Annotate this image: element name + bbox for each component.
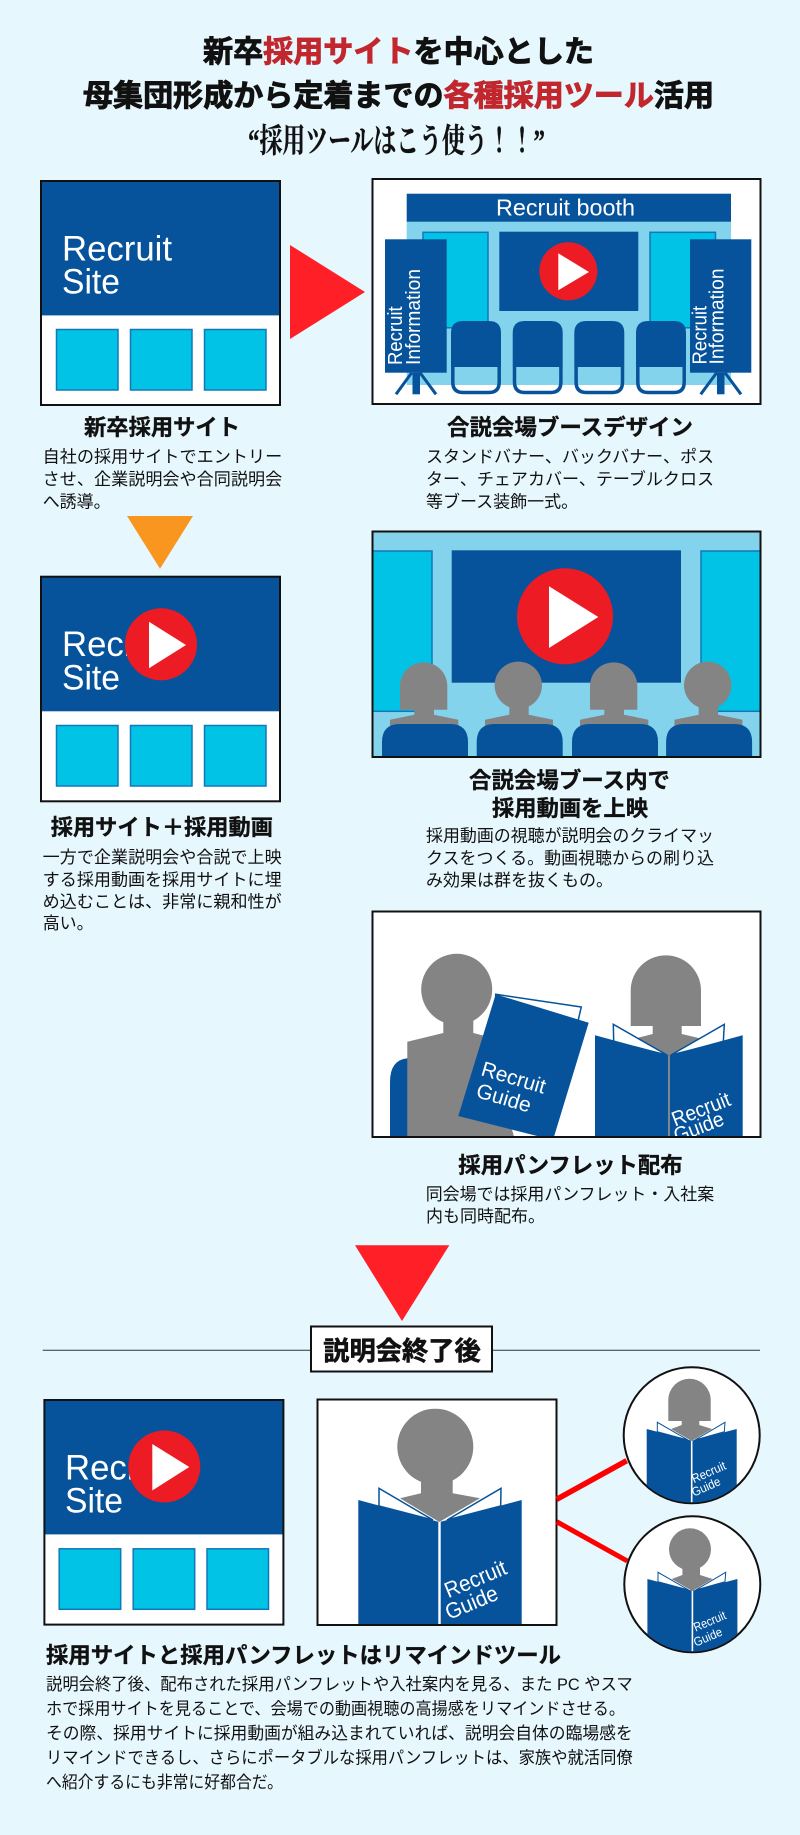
- panel: site with video: Site: [62, 658, 120, 697]
- text: recruit site: [43, 448, 282, 512]
- text: remind tools: リマインドできるし、さらにポータブルな採用パンフレットは、家族や就活同僚: [46, 1748, 633, 1768]
- left stand banner: Recruit: [385, 306, 407, 365]
- text: remind tools: ホで採用サイトを見ることで、会場での動画視聴の高揚感をリマインドさせる。: [46, 1700, 625, 1718]
- icon: play button: [539, 242, 597, 300]
- circle: family man: Guide: [691, 1625, 725, 1649]
- text: booth design: スタンドバナー、バックバナー、ポス: [426, 448, 714, 466]
- panel: pamphlet distribution: [372, 912, 760, 1148]
- divider with label: after briefing: 説明会終了後: [323, 1336, 481, 1366]
- panel: booth design: [372, 179, 760, 404]
- title: 母集団形成から定着までの各種採用ツール活用: [83, 80, 714, 113]
- man reading: [390, 954, 589, 1140]
- text: recruit site: させ、企業説明会や合同説明会: [43, 470, 282, 489]
- text: pamphlet distribution: 内も同時配布。: [426, 1207, 545, 1226]
- text: remind tools: その際、採用サイトに採用動画が組み込まれていれば、説明会自体の臨場感を: [46, 1724, 633, 1743]
- text: pamphlet distribution: 同会場では採用パンフレット・入社案: [426, 1185, 714, 1204]
- heading: video screening: 採用動画を上映: [492, 796, 648, 821]
- text: site with video: 高い。: [43, 914, 94, 933]
- circle: family woman: Recruit: [690, 1458, 729, 1486]
- text: site with video: 一方で企業説明会や合説で上映: [43, 848, 282, 867]
- circle: family man: [624, 1516, 760, 1660]
- panel: site with video: Recruit: [62, 625, 172, 664]
- connector lines: [557, 1461, 627, 1561]
- icon: play button: [517, 568, 613, 664]
- circle: family woman: Guide: [690, 1474, 723, 1499]
- panel: site with video: [41, 577, 280, 801]
- panel: person reading pamphlet: Recruit: [441, 1555, 510, 1603]
- text: video screening: [426, 826, 714, 890]
- man reading: Recruit: [479, 1058, 549, 1099]
- text: video screening: クスをつくる。動画視聴からの刷り込: [426, 849, 714, 868]
- woman reading: Guide: [671, 1108, 727, 1148]
- divider with label: after briefing: [43, 1326, 760, 1372]
- audience: [382, 662, 752, 757]
- subtitle: “採用ツールはこう使う！！”: [248, 123, 545, 160]
- text: remind tools: 説明会終了後、配布された採用パンフレットや入社案内を見る、また PC やスマ: [46, 1675, 633, 1694]
- woman reading: Recruit: [669, 1088, 734, 1131]
- left stand banner: Information: [403, 269, 425, 365]
- heading: video screening: 合説会場ブース内で: [469, 767, 670, 793]
- title: 新卒採用サイトを中心とした: [203, 36, 594, 69]
- heading: remind tools: 採用サイトと採用パンフレットはリマインドツール: [46, 1643, 561, 1668]
- left stand banner: [385, 239, 447, 394]
- icon: play button: [128, 1430, 200, 1502]
- heading: site with video: 採用サイト＋採用動画: [51, 815, 273, 840]
- text: site with video: する採用動画を採用サイトに埋: [43, 870, 282, 890]
- panel: recruit site: Recruit: [62, 229, 172, 268]
- panel: person reading pamphlet: Guide: [441, 1580, 502, 1625]
- panel: remind site: Recruit: [65, 1448, 175, 1487]
- text: video screening: み効果は群を抜くもの。: [426, 871, 613, 890]
- arrow: red down: [355, 1245, 449, 1321]
- panel: remind site: [44, 1400, 283, 1625]
- title: [83, 36, 714, 160]
- text: pamphlet distribution: [426, 1185, 714, 1226]
- chairs: [451, 321, 686, 392]
- text: site with video: [43, 848, 282, 933]
- text: remind tools: [46, 1675, 633, 1792]
- man reading: Guide: [474, 1079, 534, 1117]
- heading: booth design: 合説会場ブースデザイン: [447, 414, 693, 440]
- text: booth design: ター、チェアカバー、テーブルクロス: [426, 469, 714, 489]
- panel: remind site: Site: [65, 1482, 123, 1521]
- text: video screening: 採用動画の視聴が説明会のクライマッ: [426, 826, 714, 846]
- circle: family man: Recruit: [691, 1608, 729, 1634]
- woman reading: [595, 955, 743, 1148]
- text: recruit site: へ誘導。: [43, 492, 111, 512]
- panel: person reading pamphlet: [318, 1400, 556, 1630]
- heading: video screening: [469, 767, 670, 821]
- icon: play button: [125, 608, 197, 680]
- panel: booth design: Recruit booth: [496, 194, 635, 220]
- text: booth design: 等ブース装飾一式。: [426, 492, 578, 512]
- arrow: orange down: [127, 516, 193, 569]
- circle: family woman: [624, 1367, 760, 1510]
- right stand banner: Recruit: [690, 305, 712, 364]
- text: site with video: め込むことは、非常に親和性が: [43, 892, 282, 912]
- panel: recruit site: [41, 181, 280, 405]
- text: booth design: [426, 448, 714, 512]
- right stand banner: Information: [706, 268, 728, 364]
- text: remind tools: へ紹介するにも非常に好都合だ。: [46, 1773, 283, 1792]
- right stand banner: [690, 239, 751, 394]
- heading: pamphlet distribution: 採用パンフレット配布: [458, 1153, 683, 1178]
- heading: recruit site: 新卒採用サイト: [84, 415, 240, 440]
- text: recruit site: 自社の採用サイトでエントリー: [43, 448, 282, 466]
- panel: video screening: [365, 532, 768, 757]
- panel: recruit site: Site: [62, 262, 120, 301]
- arrow: red right: [290, 245, 365, 339]
